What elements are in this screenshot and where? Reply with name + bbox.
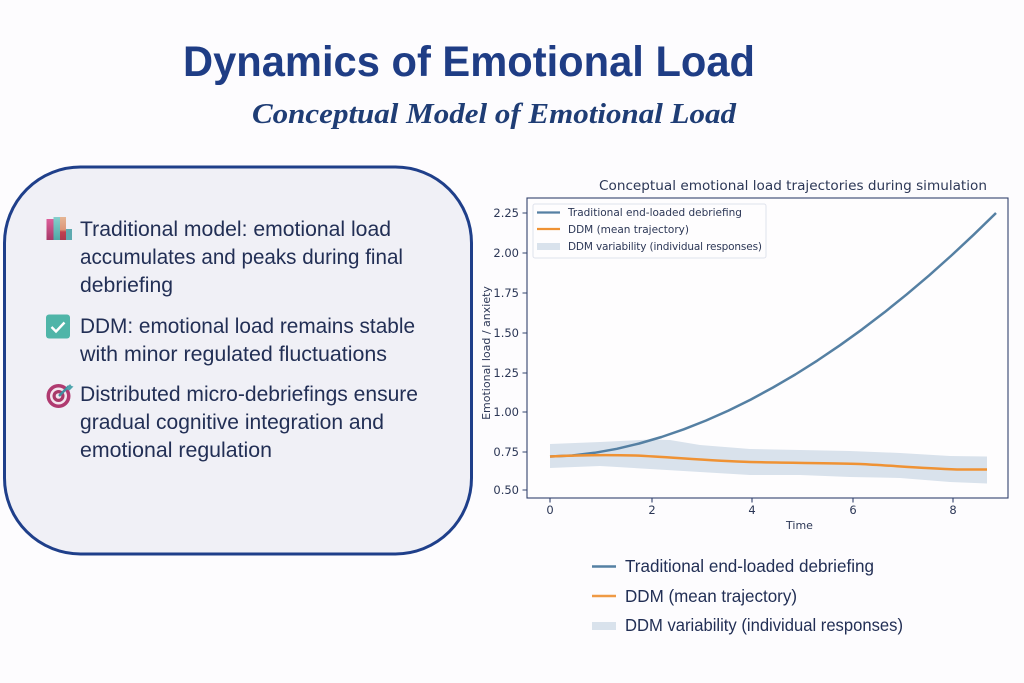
icon: target <box>46 384 74 408</box>
y axis label: Emotional load / anxiety <box>480 286 493 420</box>
chart: emotional load trajectories <box>480 179 1008 532</box>
text: traditional model: accumulates and peaks during final <box>80 246 403 269</box>
subtitle: Conceptual Model of Emotional Load <box>252 98 737 130</box>
text: ddm: with minor regulated fluctuations <box>79 343 387 366</box>
text: traditional model: debriefing <box>80 274 173 297</box>
inner legend: DDM (mean trajectory) <box>568 224 689 236</box>
legend below chart: DDM (mean trajectory) <box>625 586 797 606</box>
text: distributed micro-debriefings <box>80 383 418 462</box>
text: traditional model <box>80 218 403 297</box>
text: ddm <box>79 315 415 366</box>
chart title: Conceptual emotional load trajectories during simulation <box>599 179 987 194</box>
x axis label: Time <box>785 519 813 532</box>
y tick labels: 1.50 <box>493 326 519 340</box>
icon: check mark <box>46 314 70 338</box>
text: traditional model: Traditional model: emotional load <box>80 218 391 241</box>
legend below chart <box>592 556 903 635</box>
y tick labels: 1.25 <box>493 366 519 380</box>
ddm mean line <box>550 455 987 470</box>
y tick labels: 1.00 <box>493 405 519 419</box>
text: distributed micro-debriefings: emotional regulation <box>80 439 272 462</box>
y tick labels: 2.00 <box>493 246 519 260</box>
text: distributed micro-debriefings: gradual cognitive integration and <box>80 411 384 434</box>
icon: bar chart <box>46 217 72 240</box>
inner legend: Traditional end-loaded debriefing <box>567 207 742 219</box>
x tick labels: 2 <box>648 503 656 517</box>
text: ddm: DDM: emotional load remains stable <box>80 315 415 338</box>
title: Dynamics of Emotional Load <box>183 38 755 86</box>
y tick labels <box>493 206 519 497</box>
text: distributed micro-debriefings: Distributed micro-debriefings ensure <box>80 383 418 406</box>
y tick labels: 1.75 <box>493 286 519 300</box>
panel: key points <box>4 167 472 554</box>
x tick labels: 4 <box>748 503 756 517</box>
legend below chart: DDM variability (individual responses) <box>625 615 903 635</box>
x tick labels: 6 <box>849 503 857 517</box>
y tick labels: 0.50 <box>493 483 519 497</box>
traditional line <box>550 213 996 456</box>
y tick labels: 0.75 <box>493 445 519 459</box>
legend below chart: Traditional end-loaded debriefing <box>625 556 874 576</box>
y tick labels: 2.25 <box>493 206 519 220</box>
inner legend <box>533 204 766 258</box>
x tick labels <box>546 503 957 517</box>
variability band <box>550 440 987 484</box>
x tick labels: 8 <box>949 503 957 517</box>
axes <box>522 198 1008 502</box>
inner legend: DDM variability (individual responses) <box>568 241 762 253</box>
x tick labels: 0 <box>546 503 554 517</box>
